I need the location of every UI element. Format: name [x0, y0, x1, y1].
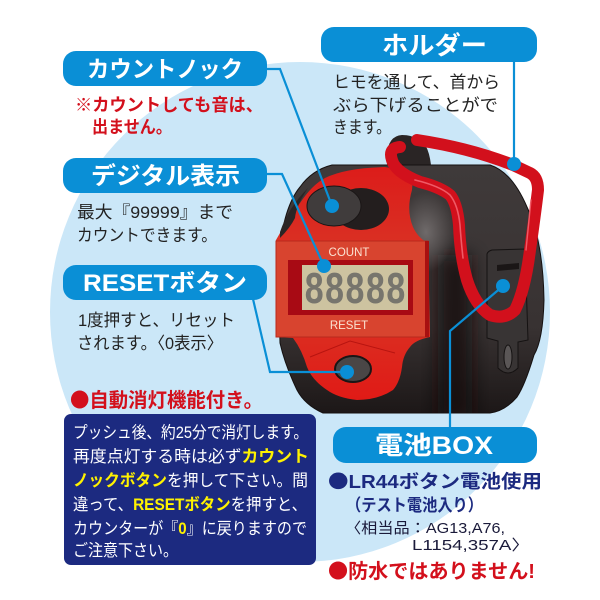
heading: デジタル表示: デジタル表示 [91, 162, 240, 190]
heading: 電池BOX: 電池BOX [375, 432, 493, 460]
device body [278, 165, 544, 413]
panel: auto light-off notice: ご注意下さい。 [73, 541, 178, 560]
strap [391, 140, 538, 317]
text: reset [77, 311, 235, 353]
panel: auto light-off notice: 再度点灯する時は必ずカウント [73, 447, 309, 466]
text: holder: きます。 [333, 118, 391, 137]
red face chevron [310, 341, 395, 357]
body shadow band [438, 255, 472, 420]
display panel [276, 241, 429, 337]
heading: auto light-off: ●自動消灯機能付き。 [70, 384, 263, 413]
heading: カウントノック: カウントノック [87, 56, 243, 82]
heading: RESETボタン [63, 265, 267, 300]
note: no sound: 出ません。 [92, 117, 172, 137]
text: battery equivalents: 〈相当品：AG13,A76, [345, 520, 505, 537]
text: holder [333, 73, 500, 137]
lcd screen [302, 265, 408, 310]
heading: ホルダー [321, 27, 537, 62]
callout dots [317, 157, 521, 379]
red face [276, 167, 430, 400]
heading: デジタル表示 [63, 158, 267, 193]
warning: not waterproof: ●防水ではありません! [328, 555, 535, 584]
text: digital display [77, 203, 233, 245]
lcd digits: 88888 [304, 266, 406, 317]
left dark wedge [280, 188, 308, 238]
count button [307, 186, 389, 230]
text: digital display: 最大『99999』まで [77, 203, 233, 222]
note: no sound [75, 95, 263, 137]
leader lines [253, 60, 514, 430]
counter device [276, 135, 544, 420]
holder knob [387, 135, 431, 168]
text: battery equivalents [345, 520, 530, 554]
battery cover [487, 249, 528, 373]
text: battery equivalents: L1154,357A〉 [412, 537, 530, 554]
text: holder: ぶら下げることがで [333, 96, 498, 115]
heading: RESETボタン: RESETボタン [83, 270, 247, 297]
text: holder: ヒモを通して、首から [333, 73, 500, 92]
heading: ホルダー: ホルダー [382, 31, 487, 60]
panel: auto light-off notice [64, 414, 316, 565]
body highlight [398, 192, 454, 272]
text: battery type: ●LR44ボタン電池使用 [328, 468, 542, 494]
text: battery type [328, 468, 542, 515]
panel: auto light-off notice: カウンターが『0』に戻りますので [73, 519, 307, 538]
panel: auto light-off notice: ノックボタンを押して下さい。間 [73, 471, 308, 490]
heading: 電池BOX [333, 427, 537, 463]
text: reset: されます。〈0表示〉 [77, 334, 223, 353]
reset button [335, 356, 371, 382]
background circle [50, 62, 550, 562]
panel: auto light-off notice: 違って、RESETボタンを押すと、 [73, 495, 307, 514]
label: RESET: RESET [330, 320, 368, 332]
label: COUNT: COUNT [329, 247, 369, 259]
text: battery type: （テスト電池入り） [346, 496, 483, 515]
text: digital display: カウントできます。 [77, 226, 217, 245]
panel: auto light-off notice: プッシュ後、約25分で消灯します。 [73, 423, 308, 442]
heading: カウントノック [63, 51, 267, 86]
text: reset: 1度押すと、リセット [78, 311, 235, 330]
note: no sound: ※カウントしても音は、 [75, 95, 263, 115]
